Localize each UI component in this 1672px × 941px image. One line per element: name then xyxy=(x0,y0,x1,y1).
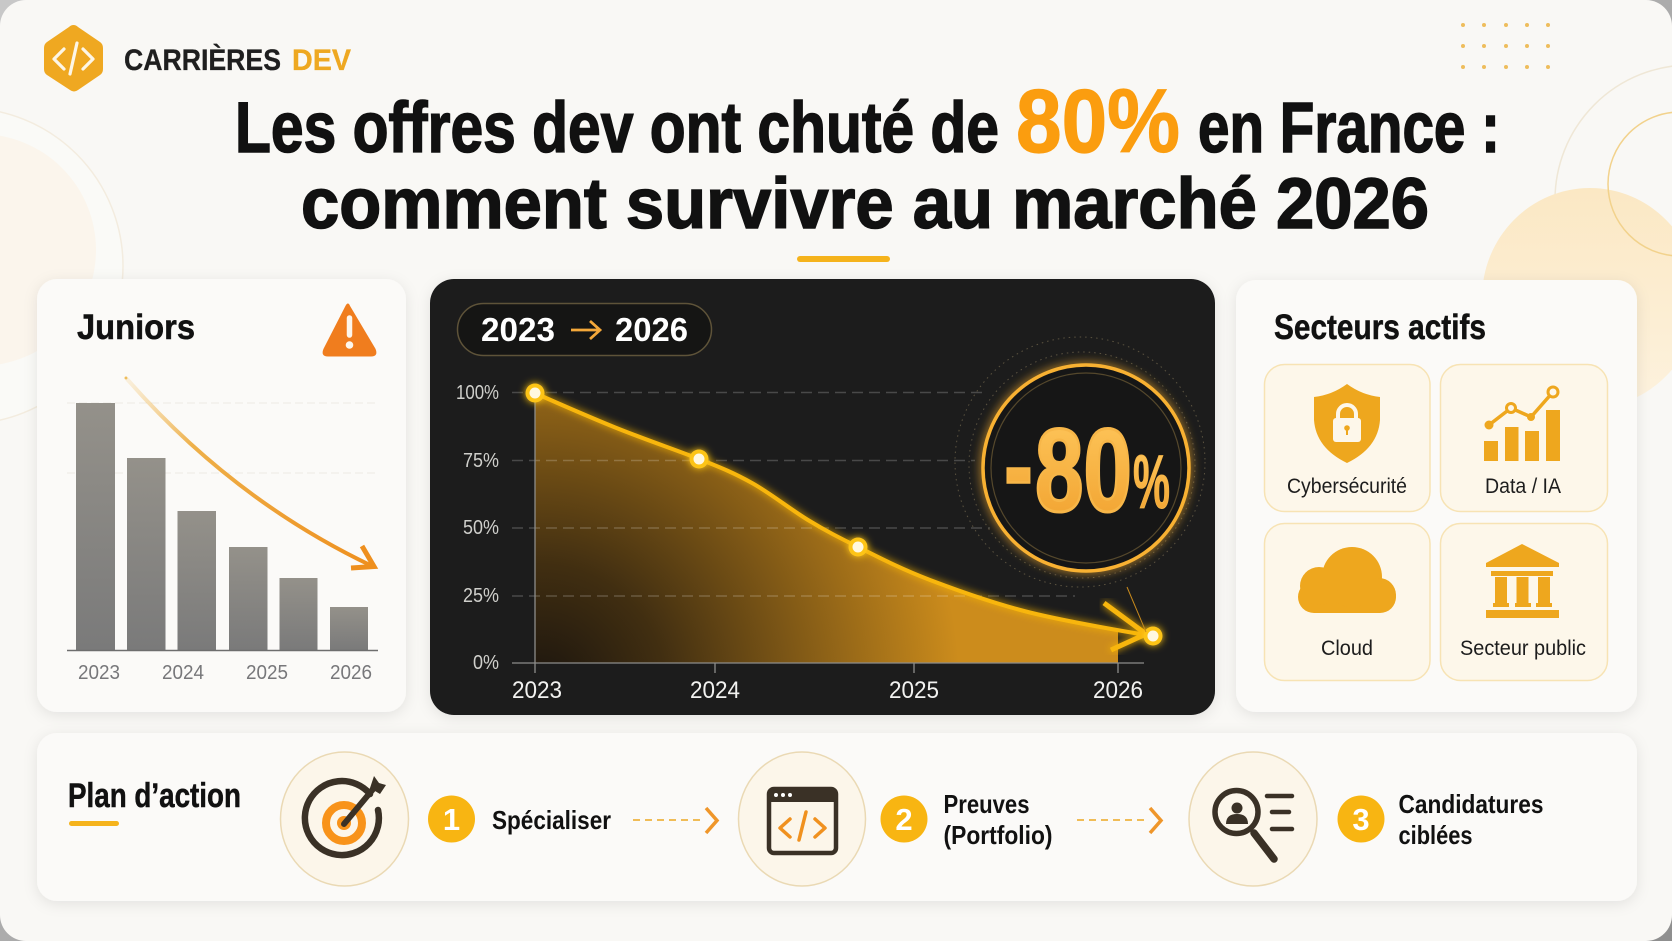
y axis labels: 75% xyxy=(463,450,499,472)
label: Preuves xyxy=(944,789,1030,819)
area chart xyxy=(456,382,1162,704)
heading: secteurs actifs: Secteurs actifs xyxy=(1274,308,1486,347)
step 3 xyxy=(1189,752,1544,886)
number badge 3 xyxy=(1338,796,1384,842)
badge: 2023 to 2026: 2023 xyxy=(481,311,555,348)
number badge 2 xyxy=(880,796,928,842)
arrow 2 xyxy=(1077,808,1161,833)
arrow head xyxy=(1104,603,1146,650)
icon: code window xyxy=(738,752,866,886)
y axis labels: 100% xyxy=(456,382,499,404)
x axis labels: 2023 xyxy=(512,677,562,704)
bar chart: 2023 xyxy=(78,662,120,684)
label: Cloud xyxy=(1321,637,1373,660)
icon: cloud xyxy=(1298,547,1396,613)
number badge 1: 1 xyxy=(443,802,460,837)
icon: target xyxy=(280,752,408,886)
y axis labels xyxy=(456,382,499,674)
title: 80% xyxy=(1016,72,1180,172)
label: Candidatures xyxy=(1398,789,1544,819)
arrow: decline xyxy=(124,376,374,568)
title xyxy=(235,72,1500,244)
badge: 2023 to 2026 xyxy=(458,304,712,356)
bar chart: 2025 xyxy=(246,662,288,684)
arrow 1 xyxy=(633,808,717,833)
callout: -80%: - xyxy=(1004,400,1033,532)
step 2 xyxy=(738,752,1052,886)
area fill xyxy=(535,393,1153,663)
label: ciblées xyxy=(1398,820,1472,850)
icon: public building xyxy=(1486,544,1559,618)
heading: juniors: Juniors xyxy=(77,308,195,347)
callout: -80%: % xyxy=(1133,440,1170,525)
bar chart: 2026 xyxy=(330,662,372,684)
step 1 xyxy=(280,752,611,886)
bar chart xyxy=(67,403,378,684)
icon: shield with lock xyxy=(1314,384,1380,463)
label: Spécialiser xyxy=(492,805,611,835)
brand accent: DEV xyxy=(292,44,351,77)
number badge 3: 3 xyxy=(1352,802,1370,837)
logo xyxy=(44,25,351,92)
icon: warning xyxy=(323,304,376,356)
label: (Portfolio) xyxy=(944,820,1052,850)
title: en France : xyxy=(1198,89,1500,168)
icon: code hexagon xyxy=(44,25,103,92)
card: secteur public xyxy=(1440,524,1608,680)
card: cloud xyxy=(1264,524,1430,680)
label xyxy=(944,789,1052,850)
x axis labels: 2024 xyxy=(690,677,740,704)
brand name: CARRIÈRES xyxy=(124,43,281,77)
panel: juniors xyxy=(37,279,406,712)
panel: main chart xyxy=(430,279,1215,715)
y axis labels: 25% xyxy=(463,585,499,607)
number badge 1 xyxy=(428,796,475,842)
callout: -80%: 80 xyxy=(1035,405,1132,537)
y axis labels: 50% xyxy=(463,517,499,539)
title underline xyxy=(797,256,890,262)
number badge 2: 2 xyxy=(895,802,913,837)
x axis labels: 2026 xyxy=(1093,677,1143,704)
label xyxy=(1398,789,1544,850)
dot grid xyxy=(1461,23,1550,69)
card: cybersécurité xyxy=(1264,364,1430,512)
heading underline xyxy=(69,821,119,826)
title: comment survivre au marché 2026 xyxy=(301,165,1429,244)
trend line xyxy=(535,393,1153,636)
decorative background shapes xyxy=(0,65,1672,424)
card: data / IA xyxy=(1440,364,1608,512)
label: Data / IA xyxy=(1485,475,1561,498)
panel: secteurs actifs xyxy=(1236,280,1637,712)
data points xyxy=(526,384,1162,646)
x axis labels: 2025 xyxy=(889,677,939,704)
icon: candidate search xyxy=(1189,752,1317,886)
label: Cybersécurité xyxy=(1287,475,1407,498)
heading: plan d'action: Plan d’action xyxy=(68,777,241,815)
callout: -80% xyxy=(955,337,1205,632)
y axis labels: 0% xyxy=(473,652,499,674)
title: Les offres dev ont chuté de xyxy=(235,89,999,168)
x axis labels xyxy=(512,677,1143,704)
badge: 2023 to 2026: 2026 xyxy=(615,311,688,348)
label: Secteur public xyxy=(1460,637,1586,660)
icon: bar chart with trend xyxy=(1484,387,1560,461)
bar chart: 2024 xyxy=(162,662,204,684)
panel: plan d'action xyxy=(37,733,1637,901)
